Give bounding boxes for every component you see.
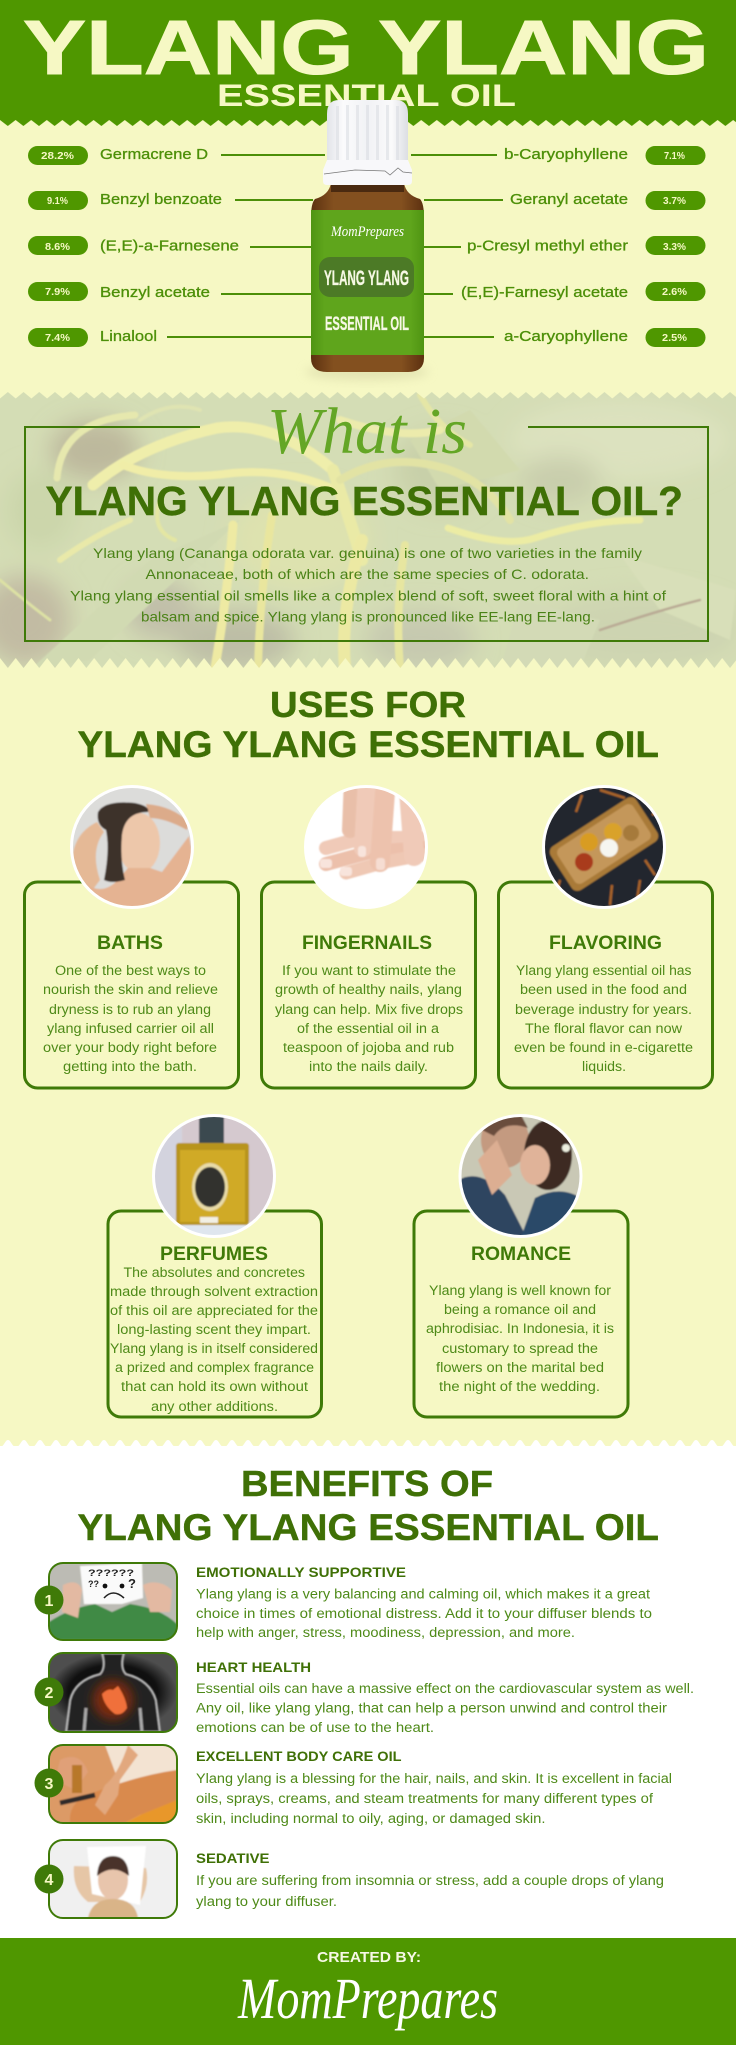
subtitle: ESSENTIAL OIL (217, 77, 516, 113)
photo: sad face paper (49, 1563, 177, 1640)
benefit text: choice in times of emotional distress. Add it to your diffuser blends to (196, 1606, 652, 1621)
bottle (305, 100, 429, 380)
bottle: YLANG YLANG (324, 267, 409, 290)
card body: customary to spread the (442, 1341, 598, 1356)
number badge (34, 1586, 64, 1614)
card body: over your body right before (43, 1040, 217, 1055)
card body: even be found in e-cigarette (514, 1040, 693, 1055)
card body: beverage industry for years. (515, 1002, 692, 1017)
benefit text: Essential oils can have a massive effect on the cardiovascular system as well. (196, 1681, 694, 1696)
card body: the night of the wedding. (439, 1379, 600, 1394)
card body: any other additions. (151, 1399, 278, 1414)
description: balsam and spice. Ylang ylang is pronounced like EE-lang EE-lang. (141, 608, 595, 624)
benefit text (196, 1771, 672, 1826)
card body (426, 1283, 614, 1394)
compound: b-Caryophyllene: 7.1% (664, 151, 685, 162)
heading: uses (78, 684, 659, 765)
benefit text: ylang to your diffuser. (196, 1894, 337, 1909)
card title: PERFUMES (160, 1244, 268, 1265)
compound: Benzyl acetate: Benzyl acetate (100, 284, 210, 301)
card body: teaspoon of jojoba and rub (283, 1040, 454, 1055)
card body: growth of healthy nails, ylang (275, 982, 462, 997)
header banner (0, 0, 736, 127)
photo: woman under pillow (49, 1840, 177, 1918)
photo: heart x-ray (49, 1653, 177, 1732)
card body: aphrodisiac. In Indonesia, it is (426, 1321, 614, 1336)
card body: liquids. (582, 1059, 626, 1074)
panel: what is (0, 392, 736, 670)
compound: p-Cresyl methyl ether (424, 236, 706, 255)
compound: b-Caryophyllene (411, 146, 706, 165)
benefit title: EXCELLENT BODY CARE OIL (196, 1748, 402, 1764)
card title: FLAVORING (549, 933, 662, 954)
compound: Farnesene: (E,E)-a-Farnesene (100, 238, 239, 254)
number badge: 4 (45, 1872, 54, 1889)
description: Annonaceae, both of which are the same species of C. odorata. (146, 566, 589, 582)
panel: benefits (0, 1440, 736, 2046)
benefit text (196, 1681, 694, 1735)
card body: One of the best ways to (55, 963, 206, 978)
composition: right column (411, 146, 706, 347)
benefit text (196, 1873, 664, 1909)
heading: benefits (78, 1463, 659, 1548)
benefit 3 (34, 1745, 672, 1826)
benefit text: Ylang ylang is a very balancing and calming oil, which makes it a great (196, 1586, 650, 1602)
card title: ROMANCE (471, 1244, 571, 1265)
compound: Germacrene D: Germacrene D (100, 146, 208, 163)
number badge (34, 1678, 64, 1706)
card body (514, 963, 693, 1074)
card body: dryness is to rub an ylang (49, 1002, 211, 1017)
card body: Ylang ylang is in itself considered (110, 1341, 318, 1356)
photo: spices on tray (544, 785, 668, 909)
compound: a-Caryophyllene (424, 328, 706, 347)
benefit 2 (34, 1653, 694, 1735)
card body (43, 963, 218, 1074)
compound: a-Caryophyllene: 2.5% (662, 333, 687, 344)
script heading: What is (267, 395, 467, 468)
card: fingernails (262, 778, 476, 1088)
card body: The absolutes and concretes (124, 1265, 305, 1280)
credit label: CREATED BY: (317, 1949, 421, 1966)
footer (0, 1938, 736, 2045)
frame (25, 427, 708, 641)
benefit title: SEDATIVE (196, 1850, 270, 1866)
benefit text (196, 1586, 652, 1640)
heading: uses: YLANG YLANG ESSENTIAL OIL (78, 724, 659, 765)
card title: BATHS (97, 933, 163, 954)
card body: of this oil are appreciated for the (110, 1303, 318, 1318)
benefit title: EMOTIONALLY SUPPORTIVE (196, 1564, 406, 1580)
compound: Linalool: Linalool (100, 328, 157, 345)
compound: Farnesyl acetate (424, 282, 706, 301)
card body (275, 963, 463, 1074)
compound: Benzyl acetate (28, 282, 312, 301)
compound: Benzyl benzoate: 9.1% (47, 196, 68, 207)
title: YLANG YLANG (23, 5, 709, 91)
heading: YLANG YLANG ESSENTIAL OIL? (46, 478, 683, 524)
benefit text: Ylang ylang is a blessing for the hair, nails, and skin. It is excellent in facial (196, 1771, 672, 1786)
compound: Farnesene (28, 236, 312, 255)
compound: Geranyl acetate: Geranyl acetate (510, 191, 628, 208)
heading: benefits: YLANG YLANG ESSENTIAL OIL (78, 1507, 659, 1548)
compound: Farnesyl acetate: 2.6% (662, 287, 687, 298)
benefit 4 (34, 1840, 664, 1918)
benefit text: oils, sprays, creams, and steam treatments for many different types of (196, 1791, 653, 1806)
photo: couple (459, 1112, 590, 1240)
logo wordmark: MomPrepares (237, 1966, 498, 2031)
compound: Benzyl acetate: 7.9% (45, 287, 70, 298)
photo: sad face paper: ?? (88, 1579, 99, 1589)
card body (110, 1265, 318, 1414)
compound: p-Cresyl methyl ether: p-Cresyl methyl ether (467, 238, 628, 254)
card: romance (414, 1112, 628, 1417)
description: Ylang ylang (Cananga odorata var. genuina) is one of two varieties in the family (93, 545, 642, 561)
description (70, 545, 666, 624)
card body: that can hold its own without (121, 1379, 308, 1394)
benefit 1 (34, 1563, 652, 1640)
card body: long-lasting scent they impart. (117, 1322, 311, 1337)
photo: woman washing hair (70, 785, 194, 909)
composition: left column (28, 146, 325, 347)
card body: Ylang ylang is well known for (429, 1283, 612, 1298)
card body: The floral flavor can now (525, 1021, 682, 1036)
number badge (34, 1768, 64, 1798)
compound: Geranyl acetate: 3.7% (663, 196, 686, 207)
photo: sad face paper: ? (128, 1576, 136, 1591)
compound: Linalool: 7.4% (45, 333, 70, 344)
compound: Farnesene: 8.6% (45, 242, 70, 253)
benefit title: HEART HEALTH (196, 1659, 311, 1675)
card body: ylang can help. Mix five drops (275, 1002, 463, 1017)
card body: If you want to stimulate the (282, 963, 456, 978)
number badge: 1 (45, 1593, 54, 1610)
card body: into the nails daily. (309, 1059, 428, 1074)
description: Ylang ylang essential oil smells like a complex blend of soft, sweet floral with a hint of (70, 588, 666, 604)
heading: benefits: BENEFITS OF (241, 1463, 493, 1504)
card title: FINGERNAILS (302, 933, 432, 954)
benefit text: Any oil, like ylang ylang, that can help a person unwind and control their (196, 1700, 668, 1716)
photo: perfume bottle (152, 1113, 276, 1240)
number badge: 2 (45, 1685, 54, 1702)
card body: getting into the bath. (63, 1059, 197, 1074)
flower photo background (0, 392, 736, 670)
card body: nourish the skin and relieve (43, 982, 218, 997)
photo: hands (304, 778, 428, 909)
compound: Geranyl acetate (424, 191, 706, 210)
compound: b-Caryophyllene: b-Caryophyllene (504, 146, 628, 163)
card body: been used in the food and (520, 982, 687, 997)
compound: Benzyl benzoate (28, 191, 313, 210)
card body: flowers on the marital bed (436, 1360, 604, 1375)
card body: Ylang ylang essential oil has (516, 963, 692, 978)
bottle: MomPrepares (330, 224, 404, 240)
card body: ylang infused carrier oil all (47, 1021, 214, 1036)
compound: p-Cresyl methyl ether: 3.3% (663, 242, 686, 253)
card: flavoring (498, 785, 712, 1088)
compound: a-Caryophyllene: a-Caryophyllene (504, 328, 628, 345)
benefit text: emotions can be of use to the heart. (196, 1720, 434, 1735)
number badge (34, 1864, 64, 1894)
heading: uses: USES FOR (270, 684, 466, 725)
number badge: 3 (45, 1776, 54, 1793)
card: perfumes (108, 1113, 322, 1417)
card body: of the essential oil in a (297, 1021, 440, 1036)
card body: a prized and complex fragrance (115, 1360, 314, 1375)
photo: sad face paper: ?????? (88, 1568, 134, 1578)
benefit text: skin, including normal to oily, aging, or damaged skin. (196, 1811, 546, 1826)
compound: Farnesyl acetate: (E,E)-Farnesyl acetate (461, 284, 628, 301)
compound: Germacrene D: 28.2% (41, 151, 74, 162)
card body: made through solvent extraction (110, 1284, 318, 1299)
photo: massage (49, 1745, 177, 1823)
compound: Benzyl benzoate: Benzyl benzoate (100, 191, 222, 208)
benefit text: If you are suffering from insomnia or stress, add a couple drops of ylang (196, 1873, 664, 1888)
card body: being a romance oil and (444, 1302, 596, 1317)
card: baths (24, 785, 238, 1088)
compound: Germacrene D (28, 146, 325, 165)
benefit text: help with anger, stress, moodiness, depression, and more. (196, 1625, 575, 1640)
bottle: ESSENTIAL OIL (325, 314, 409, 335)
compound: Linalool (28, 328, 312, 347)
